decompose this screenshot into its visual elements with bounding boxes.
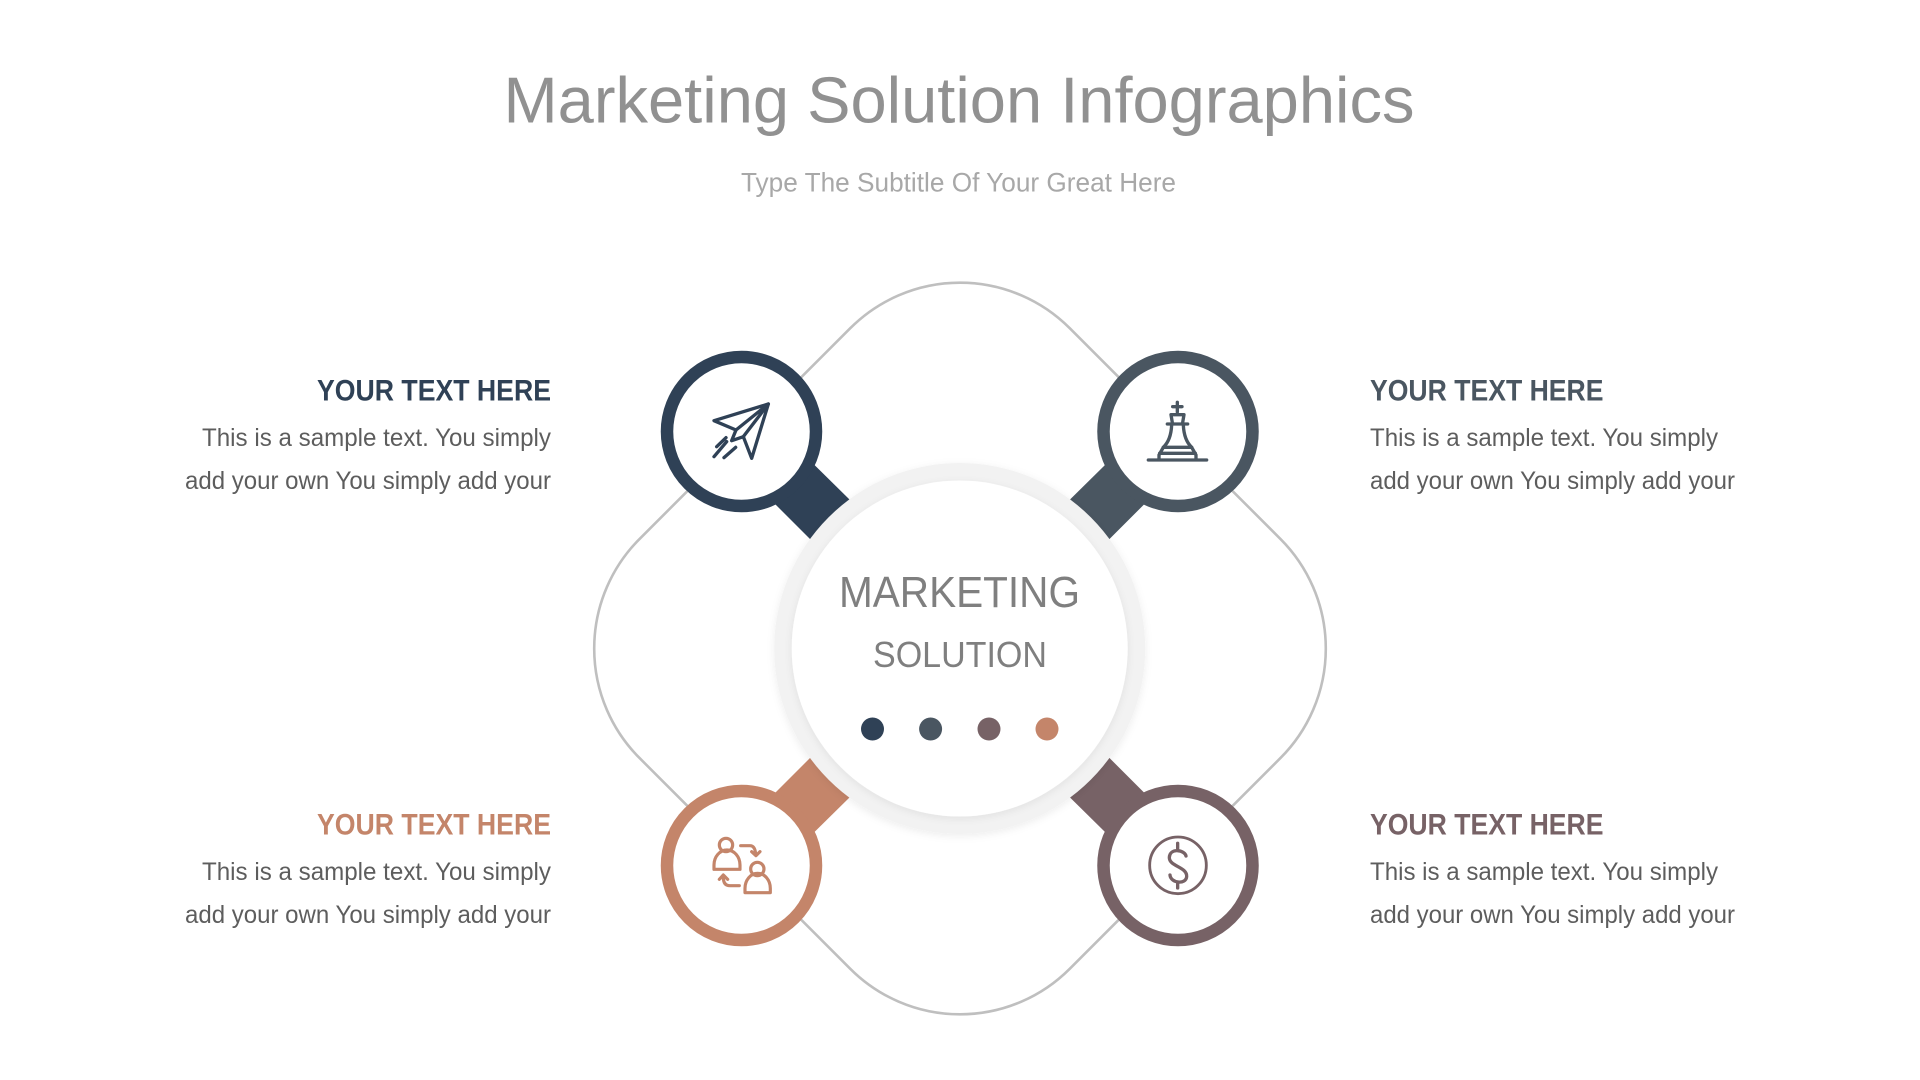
node: bottom left terracotta with people exchange <box>667 757 850 940</box>
icon: paper plane <box>714 404 768 458</box>
center hub <box>774 463 1145 834</box>
text block: bottom right: add your own You simply add your <box>1370 901 1735 929</box>
text block: bottom left <box>185 808 551 929</box>
text block: bottom right <box>1370 808 1735 929</box>
text block: top right <box>1370 375 1735 495</box>
text block: bottom left: YOUR TEXT HERE <box>317 808 551 842</box>
text block: top left <box>185 375 551 495</box>
text block: bottom left: add your own You simply add your <box>185 901 551 929</box>
text block: top left: YOUR TEXT HERE <box>317 375 551 408</box>
text block: top right: This is a sample text. You simply <box>1370 424 1718 452</box>
hub subtitle: SOLUTION <box>873 634 1047 675</box>
title: Marketing Solution Infographics <box>504 64 1414 137</box>
outer rounded diamond outline <box>594 283 1326 1014</box>
icon: dollar coin <box>1150 837 1206 894</box>
text block: top right: YOUR TEXT HERE <box>1370 375 1604 408</box>
hub colour dots <box>861 718 1058 740</box>
text block: bottom right: This is a sample text. You simply <box>1370 858 1718 886</box>
text block: top left: This is a sample text. You simply <box>202 424 551 452</box>
text block: bottom left: This is a sample text. You simply <box>202 858 551 886</box>
icon: chess king <box>1148 402 1207 460</box>
subtitle: Type The Subtitle Of Your Great Here <box>741 168 1176 198</box>
node: bottom right mauve with dollar coin <box>1069 757 1252 940</box>
text block: top right: add your own You simply add your <box>1370 467 1735 495</box>
text block: bottom right: YOUR TEXT HERE <box>1370 808 1604 842</box>
text block: top left: add your own You simply add your <box>185 467 551 495</box>
node: top right slate with chess king <box>1069 357 1252 540</box>
hub title: MARKETING <box>839 568 1080 617</box>
node: top left navy with paper plane <box>667 357 850 540</box>
icon: people exchange <box>714 838 770 893</box>
